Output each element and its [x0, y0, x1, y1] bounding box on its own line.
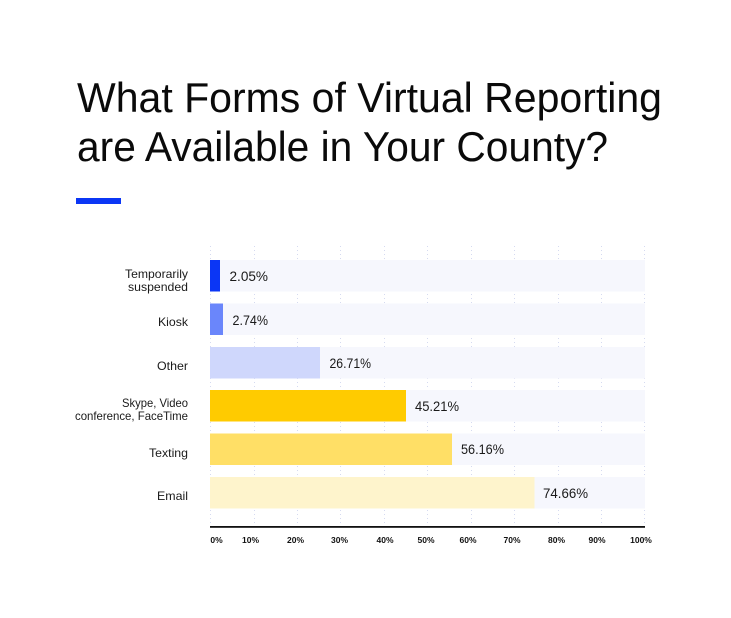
- title: What Forms of Virtual Reporting: [77, 74, 662, 121]
- row: Other: [157, 347, 645, 378]
- x axis: 80%: [548, 535, 565, 545]
- row: Texting: Texting: [149, 446, 188, 460]
- row: Skype, Video conference, FaceTime: conference, FaceTime: [75, 409, 188, 423]
- x axis: [210, 526, 652, 545]
- title: [77, 74, 662, 170]
- title: are Available in Your County?: [77, 123, 608, 170]
- row: Other: Other: [157, 359, 188, 373]
- row: Temporarily suspended: 2.05%: [230, 268, 268, 284]
- row: Texting: [149, 434, 645, 465]
- accent rule under title: [76, 198, 121, 204]
- row: Other: 26.71%: [330, 355, 371, 371]
- row: Email: 74.66%: [543, 485, 588, 501]
- row: Temporarily suspended: [125, 260, 645, 294]
- row: Skype, Video conference, FaceTime: [75, 390, 645, 423]
- x axis: 90%: [588, 535, 606, 545]
- row: Temporarily suspended: Temporarily: [125, 267, 188, 281]
- x axis: 0%: [210, 535, 223, 545]
- row: Temporarily suspended: suspended: [128, 280, 188, 294]
- row: Email: Email: [157, 489, 188, 503]
- x axis: 20%: [287, 535, 304, 545]
- row: Kiosk: 2.74%: [232, 312, 268, 328]
- row: Texting: 56.16%: [461, 441, 504, 457]
- x axis: 70%: [503, 535, 521, 545]
- x axis: 50%: [417, 535, 435, 545]
- x axis: 10%: [242, 535, 259, 545]
- x axis: 40%: [376, 535, 394, 545]
- row: Skype, Video conference, FaceTime: 45.21%: [415, 398, 459, 414]
- row: Kiosk: [158, 304, 645, 335]
- row: Email: [157, 477, 645, 508]
- row: Kiosk: Kiosk: [158, 315, 189, 329]
- x axis: 100%: [630, 535, 652, 545]
- bar chart: [75, 246, 652, 545]
- x axis: 60%: [459, 535, 477, 545]
- x axis: 30%: [331, 535, 348, 545]
- row: Skype, Video conference, FaceTime: Skype, Video: [122, 396, 188, 410]
